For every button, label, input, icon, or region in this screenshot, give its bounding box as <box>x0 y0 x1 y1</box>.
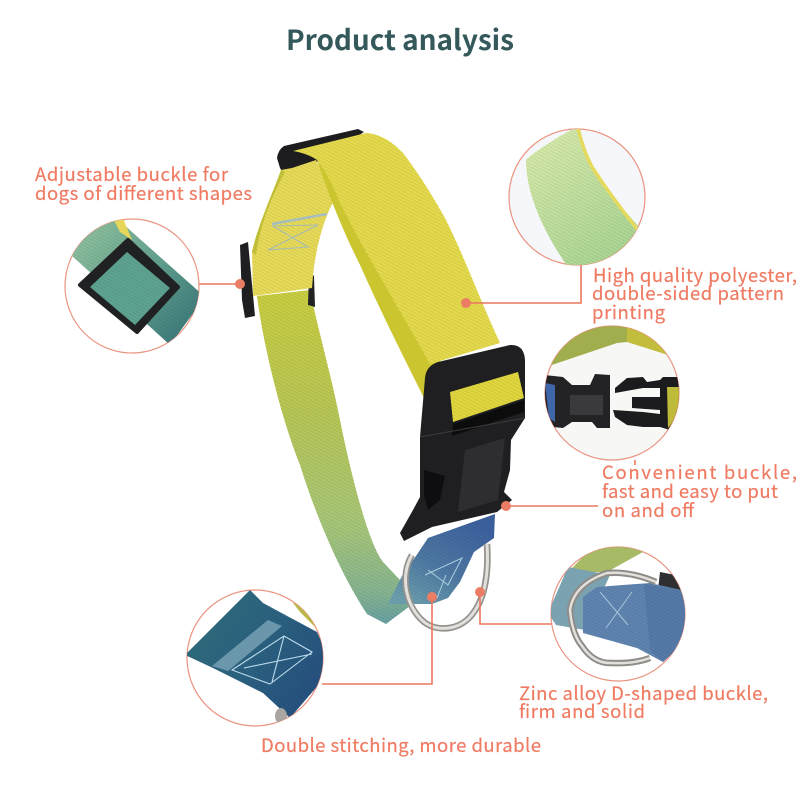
detail: fabric close-up <box>526 128 640 270</box>
lead line <box>199 283 240 285</box>
label: double-sided pattern <box>592 280 784 306</box>
detail circle <box>509 129 645 265</box>
marker dot <box>461 298 471 308</box>
detail: open buckle <box>545 326 679 430</box>
top slider <box>277 129 364 176</box>
collar product illustration <box>240 129 525 628</box>
label: High quality polyester, <box>593 262 797 288</box>
inner side of top strap <box>316 156 440 398</box>
label: Zinc alloy D-shaped buckle, <box>519 680 768 706</box>
callout: D-shaped buckle <box>475 540 768 724</box>
lead line <box>480 592 552 624</box>
rear slider <box>240 242 255 318</box>
marker dot <box>235 279 245 289</box>
callout: convenient buckle <box>501 310 797 523</box>
label: Adjustable buckle for <box>35 161 229 187</box>
title: Product analysis <box>286 19 514 59</box>
marker dot <box>475 587 485 597</box>
label: dogs of different shapes <box>35 180 252 206</box>
D-ring <box>406 544 487 628</box>
main buckle <box>400 345 525 541</box>
callout: adjustable buckle <box>35 161 252 353</box>
blue tab <box>388 514 495 604</box>
back folded strap with stitching <box>252 160 336 296</box>
label: printing <box>592 299 666 325</box>
lead line <box>506 505 598 507</box>
label: on and off <box>602 497 695 523</box>
detail circle <box>187 590 323 726</box>
detail circle <box>65 219 199 353</box>
marker dot <box>427 592 437 602</box>
callout: double stitching <box>185 590 541 758</box>
lower strap <box>257 290 410 624</box>
marker dot <box>501 501 511 511</box>
label: Double stitching, more durable <box>261 732 541 758</box>
front top strap <box>293 133 500 364</box>
detail: stitching close-up <box>185 590 328 724</box>
lead line <box>466 264 581 303</box>
label: firm and solid <box>519 698 645 724</box>
label: fast and easy to put <box>602 478 778 504</box>
label: Convenient buckle, <box>602 459 797 485</box>
detail: slider on strap <box>72 220 199 343</box>
detail: D-ring close-up <box>548 540 690 663</box>
detail circle <box>551 547 685 681</box>
lead line <box>322 597 432 684</box>
detail circle <box>545 326 679 460</box>
callout: polyester <box>461 128 797 325</box>
